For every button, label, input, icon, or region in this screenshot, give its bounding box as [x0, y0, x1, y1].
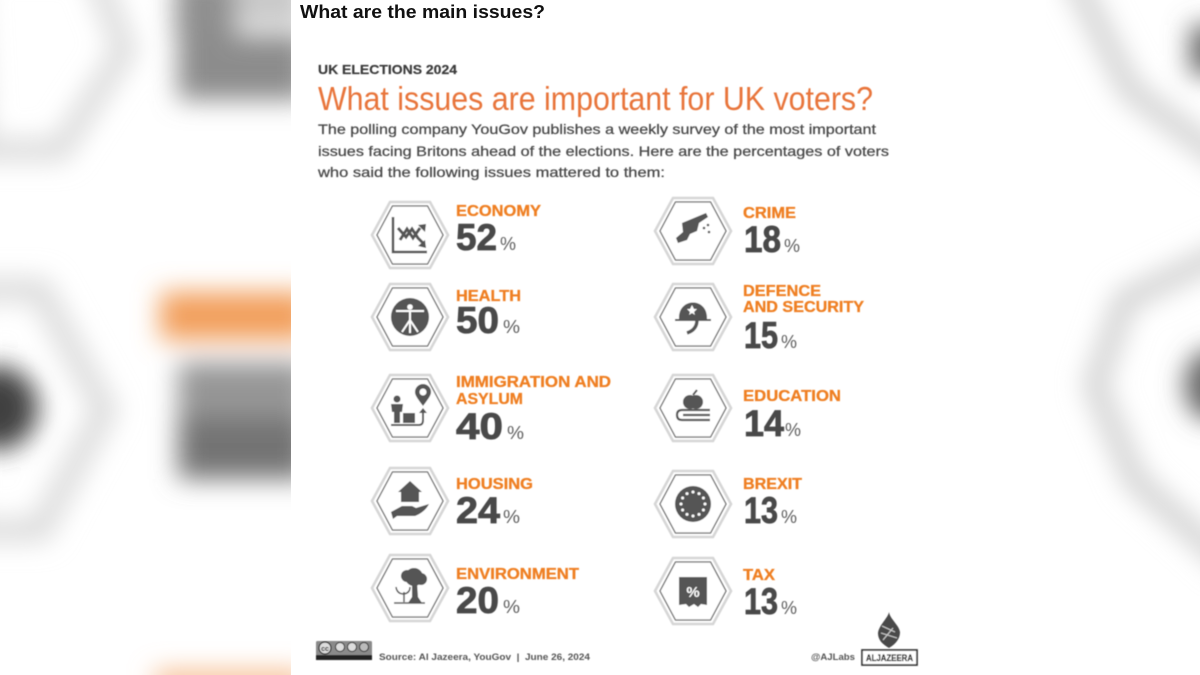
page heading: What are the main issues? — [300, 1, 545, 22]
item: crime — [655, 198, 800, 264]
item: tax: % — [781, 598, 797, 618]
item: brexit: BREXIT — [743, 476, 803, 493]
item: housing: HOUSING — [456, 476, 533, 493]
item: housing — [372, 468, 533, 534]
intro text: issues facing Britons ahead of the elections. Here are the percentages of voters — [318, 143, 889, 159]
footer: creative commons badge: cc — [321, 646, 329, 653]
item: economy: 52 — [456, 217, 497, 258]
footer: handle: @AJLabs — [811, 652, 855, 663]
item: crime: % — [784, 236, 800, 256]
centre white panel — [291, 0, 1046, 675]
icon: percent receipt — [655, 558, 731, 624]
item: health: 50 — [456, 300, 499, 341]
intro text — [317, 121, 889, 180]
blurred background: right — [1070, 0, 1200, 565]
item: health: HEALTH — [456, 288, 521, 305]
kicker: UK ELECTIONS 2024 — [318, 62, 458, 77]
item: brexit: % — [781, 507, 797, 527]
icon: house on hand — [372, 468, 448, 534]
intro text: The polling company YouGov publishes a weekly survey of the most important — [318, 121, 876, 137]
item: economy — [372, 202, 542, 268]
item: defence and security: % — [781, 332, 797, 352]
item: defence and security: AND SECURITY — [743, 299, 865, 316]
icon: percent receipt: % — [686, 584, 700, 601]
item: brexit: 13 — [744, 490, 778, 531]
infographic title: What issues are important for UK voters? — [318, 80, 873, 117]
blurred background: left — [0, 0, 310, 675]
intro text: who said the following issues mattered to them: — [317, 164, 665, 180]
icon: apple on book — [655, 375, 731, 441]
item: defence and security: 15 — [744, 315, 778, 356]
item: immigration and asylum — [372, 374, 611, 447]
icon: tree and seedling — [372, 555, 448, 621]
icon: vitruvian figure — [372, 284, 448, 350]
icon: traveller and location pin — [372, 375, 448, 441]
logo: Al Jazeera: ALJAZEERA — [866, 653, 913, 663]
item: crime: 18 — [744, 219, 781, 260]
item: defence and security: DEFENCE — [743, 283, 821, 300]
item: tax: TAX — [743, 567, 776, 584]
item: health: % — [503, 317, 520, 337]
item: tax — [655, 558, 797, 624]
item: economy: % — [500, 234, 516, 254]
icon: helmet — [655, 284, 731, 350]
icon: pistol — [655, 198, 731, 264]
footer: source: Source: Al Jazeera, YouGov | June 26, 2024 — [379, 652, 591, 663]
item: housing: 24 — [456, 490, 500, 531]
item: brexit — [655, 471, 803, 537]
item: defence and security — [655, 283, 865, 356]
item: crime: CRIME — [743, 205, 796, 222]
logo: Al Jazeera — [862, 612, 917, 665]
item: immigration and asylum: IMMIGRATION AND — [456, 374, 611, 391]
item: education — [655, 375, 841, 444]
icon: economy chart — [372, 202, 448, 268]
item: education: 14 — [744, 403, 784, 444]
item: housing: % — [503, 507, 520, 527]
item: health — [372, 284, 521, 350]
item: immigration and asylum: % — [507, 423, 524, 443]
icon: EU stars circle — [655, 471, 731, 537]
item: immigration and asylum: 40 — [456, 406, 503, 447]
item: tax: 13 — [744, 581, 778, 622]
item: education: EDUCATION — [743, 388, 841, 405]
item: economy: ECONOMY — [456, 203, 542, 220]
infographic — [316, 62, 917, 665]
footer: creative commons badge — [316, 641, 372, 660]
item: environment: ENVIRONMENT — [456, 566, 580, 583]
item: education: % — [785, 420, 801, 440]
item: environment — [372, 555, 580, 621]
item: environment: % — [503, 597, 520, 617]
item: environment: 20 — [456, 580, 499, 621]
item: immigration and asylum: ASYLUM — [456, 391, 523, 408]
